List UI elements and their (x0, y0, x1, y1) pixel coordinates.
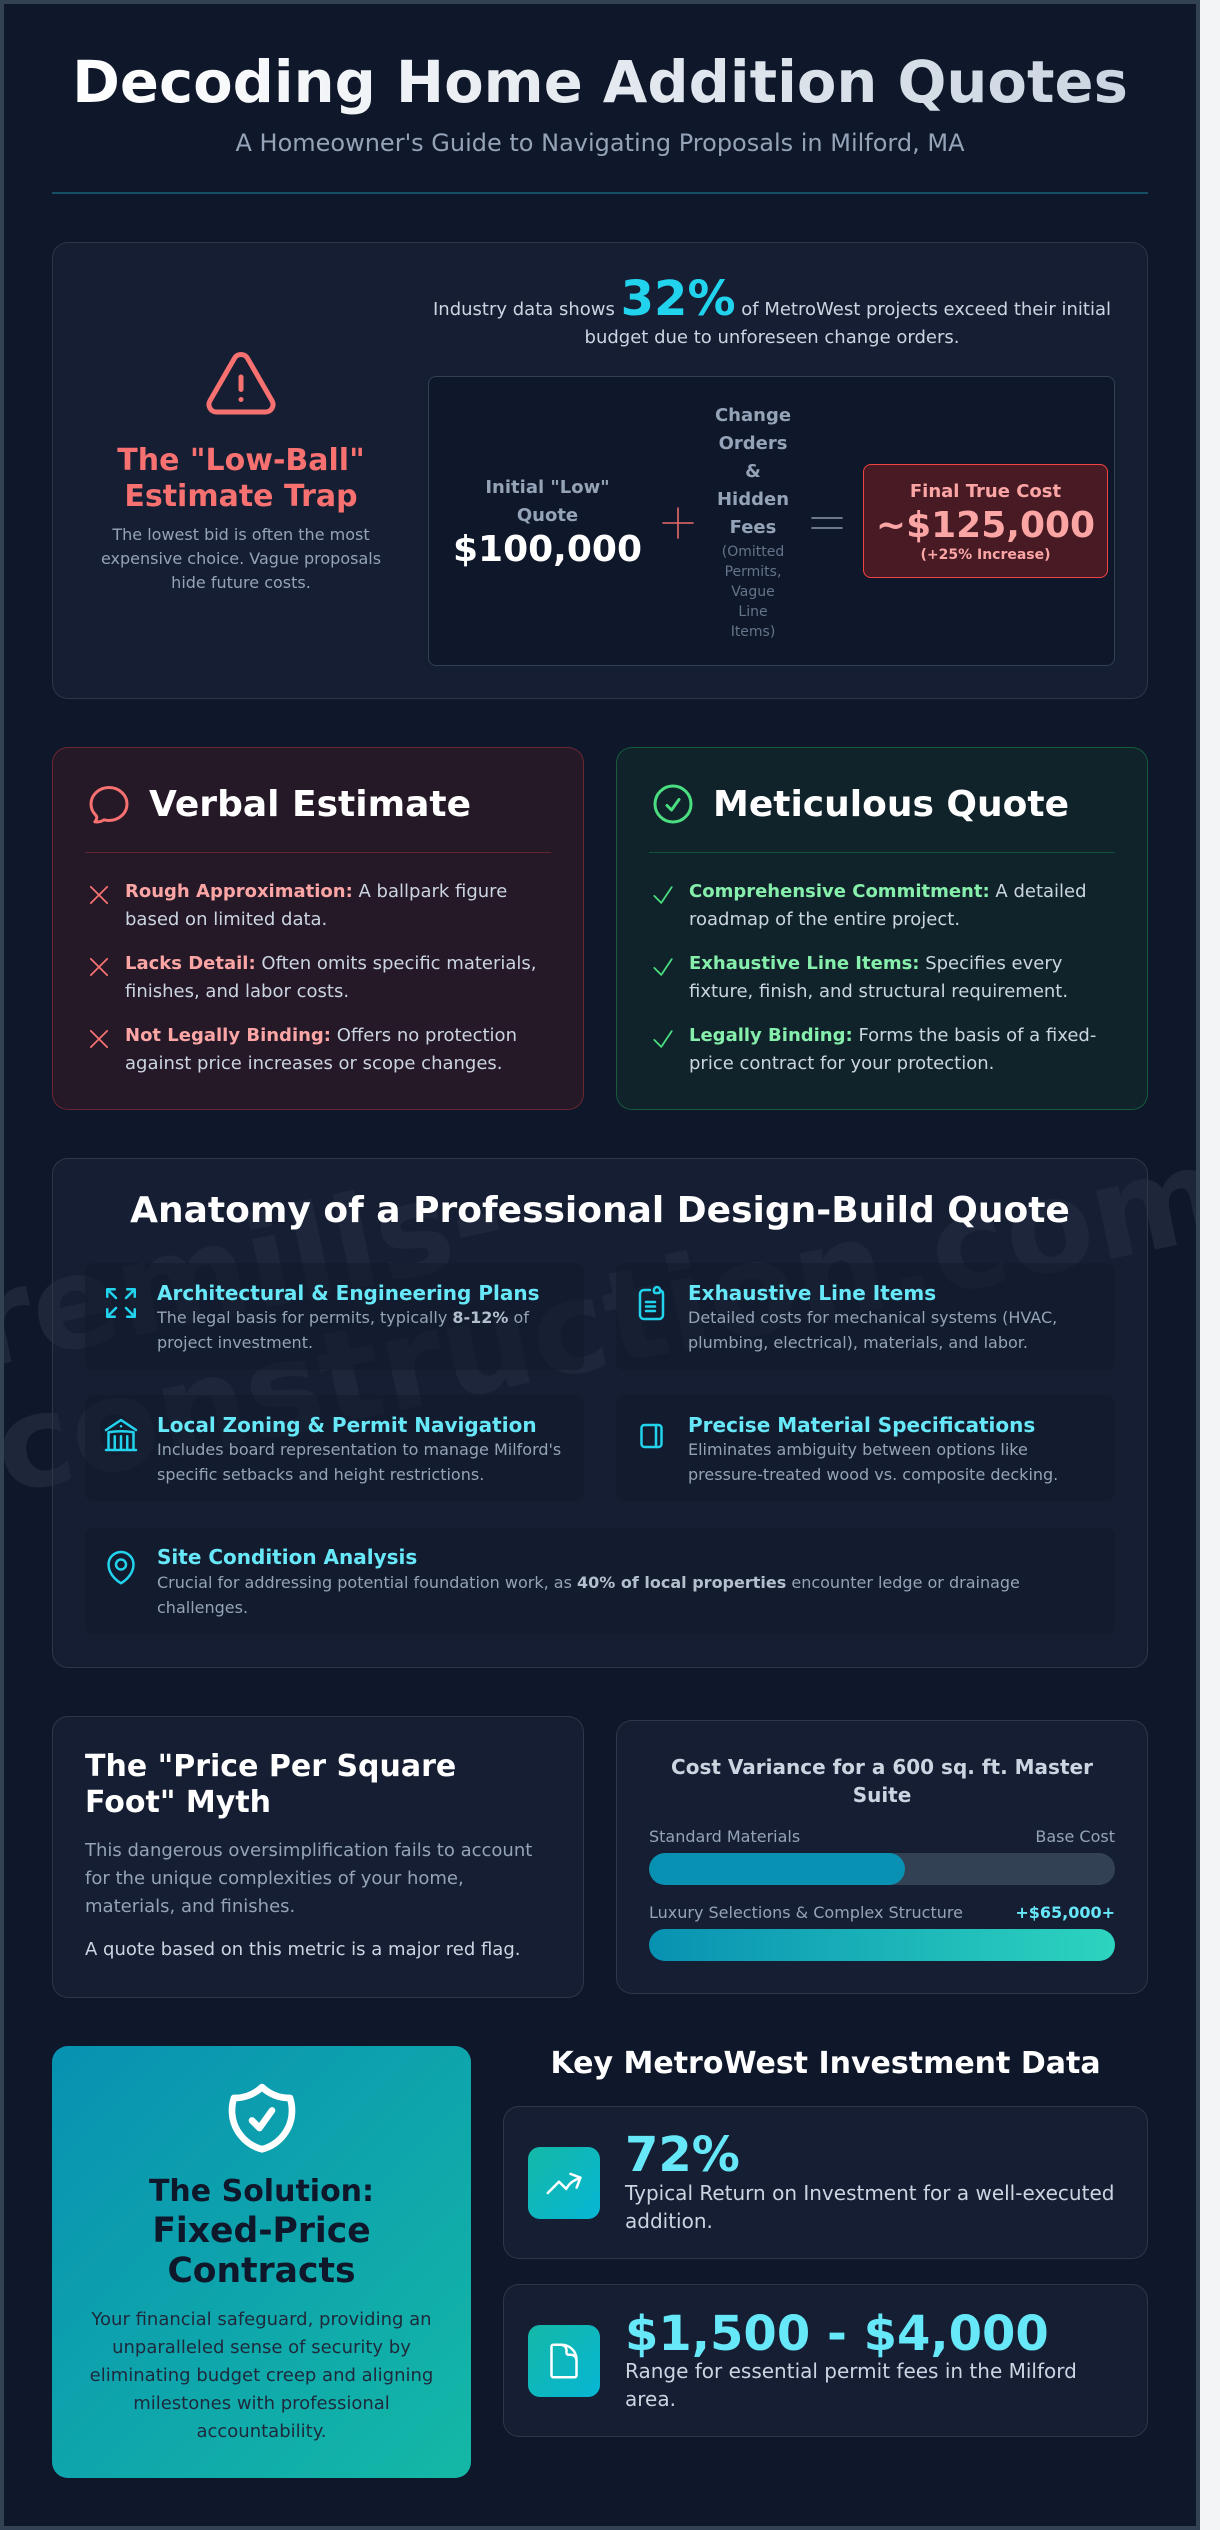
icon: check 3 (653, 1030, 673, 1048)
stat description (625, 2179, 1114, 2235)
statistic sentence: Industry data shows 32% of MetroWest projects exceed their initial (433, 271, 1111, 327)
added cost label: +$65,000+ (1015, 1903, 1115, 1922)
stat value: $1,500 - $4,000 (625, 2306, 1049, 2362)
panel: fixed-price solution (52, 2046, 471, 2478)
initial amount: $100,000 (453, 529, 642, 570)
stat description (625, 2357, 1077, 2413)
myth heading: The "Price Per Square (85, 1749, 456, 1784)
icon: shield check (228, 2084, 296, 2153)
stat value: 72% (625, 2127, 740, 2183)
item heading: Exhaustive Line Items (688, 1281, 936, 1305)
point: legally binding: Legally Binding: Forms the basis of a fixed- (689, 1025, 1096, 1046)
panel: verbal estimate (52, 747, 584, 1110)
verbal heading: Verbal Estimate (149, 784, 471, 825)
stat card: permit fees (503, 2284, 1148, 2437)
myth description (84, 1840, 532, 1917)
icon: equals (811, 517, 843, 529)
item heading: Local Zoning & Permit Navigation (157, 1413, 537, 1437)
change orders label (715, 405, 791, 538)
trap heading (117, 443, 365, 514)
icon: chat bubble (90, 786, 128, 824)
initial quote: Initial "Low" (485, 477, 610, 498)
subtitle: A Homeowner's Guide to Navigating Proposals in Milford, MA (235, 129, 964, 157)
item heading: Architectural & Engineering Plans (157, 1281, 539, 1305)
change orders note: (Omitted (722, 544, 784, 560)
equation box (428, 376, 1115, 666)
icon: check 2 (653, 958, 673, 976)
point: comprehensive commitment: roadmap of the entire project. (689, 909, 960, 930)
solution description: accountability. (196, 2421, 327, 2442)
myth description: for the unique complexities of your home, (85, 1868, 464, 1889)
panel: meticulous quote (616, 747, 1148, 1110)
icon: trending up (544, 2163, 584, 2203)
change orders note (722, 544, 784, 640)
panel: low-ball estimate trap (52, 242, 1148, 699)
item text: Crucial for addressing potential foundation work, as 40% of local properties encounter ledge or drainage (157, 1573, 1020, 1592)
solution heading: The Solution: (149, 2174, 374, 2209)
point: lacks detail (125, 953, 537, 1002)
trap heading: Estimate Trap (124, 479, 358, 514)
item text (157, 1573, 1020, 1616)
solution description: Your financial safeguard, providing an (91, 2309, 432, 2330)
stat card: return on investment (503, 2106, 1148, 2259)
item text: plumbing, electrical), materials, and labor. (688, 1332, 1028, 1352)
item text: Detailed costs for mechanical systems (HVAC, (688, 1308, 1057, 1327)
item text: pressure-treated wood vs. composite decking. (688, 1464, 1058, 1484)
item text: Eliminates ambiguity between options like (688, 1440, 1028, 1459)
panel: price per square foot myth (52, 1716, 584, 1998)
trap description (101, 525, 381, 592)
icon tile: trend (528, 2147, 600, 2219)
meticulous heading: Meticulous Quote (713, 784, 1069, 825)
bar: luxury selections (649, 1929, 1115, 1961)
standard label: Standard Materials (649, 1827, 800, 1846)
item text: project investment. (157, 1332, 313, 1352)
chart heading: Suite (853, 1783, 911, 1807)
panel: anatomy of a quote (52, 1158, 1148, 1668)
base cost label: Base Cost (1035, 1827, 1115, 1846)
item text: specific setbacks and height restrictions. (157, 1464, 484, 1484)
myth heading (85, 1749, 456, 1820)
icon: material sample (640, 1424, 663, 1448)
investment data heading: Key MetroWest Investment Data (550, 2046, 1101, 2081)
icon: clipboard (638, 1286, 664, 1320)
point: legally binding: price contract for your protection. (689, 1053, 994, 1074)
point: exhaustive line items: Exhaustive Line Items: Specifies every (689, 953, 1062, 974)
point: exhaustive line items (689, 953, 1068, 1002)
point: exhaustive line items: fixture, finish, and structural requirement. (689, 981, 1068, 1002)
change orders label: Change (715, 405, 791, 426)
item heading: Precise Material Specifications (688, 1413, 1035, 1437)
solution description: eliminating budget creep and aligning (90, 2365, 433, 2386)
change orders label: Hidden (717, 489, 789, 510)
item: exhaustive line items (616, 1263, 1115, 1370)
item text: The legal basis for permits, typically 8-12% of (157, 1308, 529, 1327)
icon: warning triangle (206, 352, 276, 414)
item text (688, 1308, 1057, 1352)
icon tile: document (528, 2325, 600, 2397)
point: rough approximation: based on limited data. (125, 909, 327, 930)
item: architectural plans (85, 1263, 584, 1370)
icon: document (544, 2341, 584, 2381)
point: rough approximation (125, 881, 507, 930)
myth heading: Foot" Myth (85, 1785, 271, 1820)
stat description: addition. (625, 2209, 713, 2233)
item text (157, 1440, 561, 1484)
point: rough approximation: Rough Approximation: A ballpark figure (125, 881, 507, 902)
initial quote (485, 477, 610, 526)
trap description: The lowest bid is often the most (112, 525, 370, 544)
myth warning: A quote based on this metric is a major red flag. (85, 1939, 520, 1960)
icon: check circle (654, 784, 692, 824)
change orders note: Items) (731, 624, 775, 640)
change orders label: Orders (719, 433, 787, 454)
trap heading: The "Low-Ball" (117, 443, 365, 478)
panel: cost variance chart (616, 1720, 1148, 1994)
solution subheading (152, 2211, 371, 2291)
point: comprehensive commitment: Comprehensive Commitment: A detailed (689, 881, 1087, 902)
bar: standard materials (649, 1853, 1115, 1885)
change orders note: Vague (731, 584, 775, 600)
chart heading (671, 1755, 1093, 1807)
point: not legally binding: Not Legally Binding: Offers no protection (125, 1025, 517, 1046)
solution description: unparalleled sense of security by (112, 2337, 411, 2358)
icon: plus (662, 507, 694, 539)
icon: x mark 1 (90, 886, 108, 904)
item text: challenges. (157, 1598, 248, 1616)
change orders note: Line (738, 604, 768, 620)
item text (688, 1440, 1058, 1484)
final cost box (863, 464, 1108, 578)
change orders label: Fees (730, 517, 776, 538)
icon: check 1 (653, 886, 673, 904)
item: material specifications (616, 1395, 1115, 1501)
myth description: This dangerous oversimplification fails to account (85, 1840, 532, 1861)
anatomy heading: Anatomy of a Professional Design-Build Quote (130, 1190, 1070, 1231)
item: zoning and permits (85, 1395, 584, 1501)
trap description: expensive choice. Vague proposals (101, 549, 381, 568)
stat description: Range for essential permit fees in the Milford (625, 2359, 1077, 2383)
solution description: milestones with professional (133, 2393, 390, 2414)
change orders label: & (745, 461, 761, 482)
point: lacks detail: finishes, and labor costs. (125, 981, 349, 1002)
point: not legally binding: against price increases or scope changes. (125, 1053, 503, 1074)
title: Decoding Home Addition Quotes (72, 49, 1128, 116)
myth description: materials, and finishes. (85, 1896, 295, 1917)
stat description: area. (625, 2387, 676, 2411)
solution description (52, 2306, 471, 2446)
chart heading: Cost Variance for a 600 sq. ft. Master (671, 1755, 1093, 1779)
point: not legally binding (125, 1025, 517, 1074)
item text: Includes board representation to manage Milford's (157, 1440, 561, 1459)
solution subheading: Contracts (167, 2251, 356, 2291)
initial quote: Quote (517, 505, 578, 526)
item text (156, 1308, 530, 1352)
icon: x mark 3 (90, 1030, 108, 1048)
stat description: Typical Return on Investment for a well-executed (625, 2181, 1114, 2205)
trap description: hide future costs. (171, 573, 311, 592)
point: lacks detail: Lacks Detail: Often omits specific materials, (125, 953, 537, 974)
item: site condition analysis (85, 1528, 1115, 1634)
luxury label: Luxury Selections & Complex Structure (649, 1903, 963, 1922)
icon: civic building (104, 1418, 138, 1452)
icon: map pin (107, 1550, 135, 1584)
change orders note: Permits, (725, 564, 781, 580)
icon: expand arrows (106, 1288, 136, 1318)
item heading: Site Condition Analysis (157, 1545, 417, 1569)
increase note: (+25% Increase) (920, 547, 1051, 563)
point: comprehensive commitment (689, 881, 1087, 930)
final cost label: Final True Cost (910, 481, 1061, 502)
final cost amount: ~$125,000 (876, 505, 1095, 546)
statistic sentence: budget due to unforeseen change orders. (585, 327, 959, 348)
solution subheading: Fixed-Price (152, 2211, 371, 2251)
icon: x mark 2 (90, 958, 108, 976)
point: legally binding (689, 1025, 1096, 1074)
